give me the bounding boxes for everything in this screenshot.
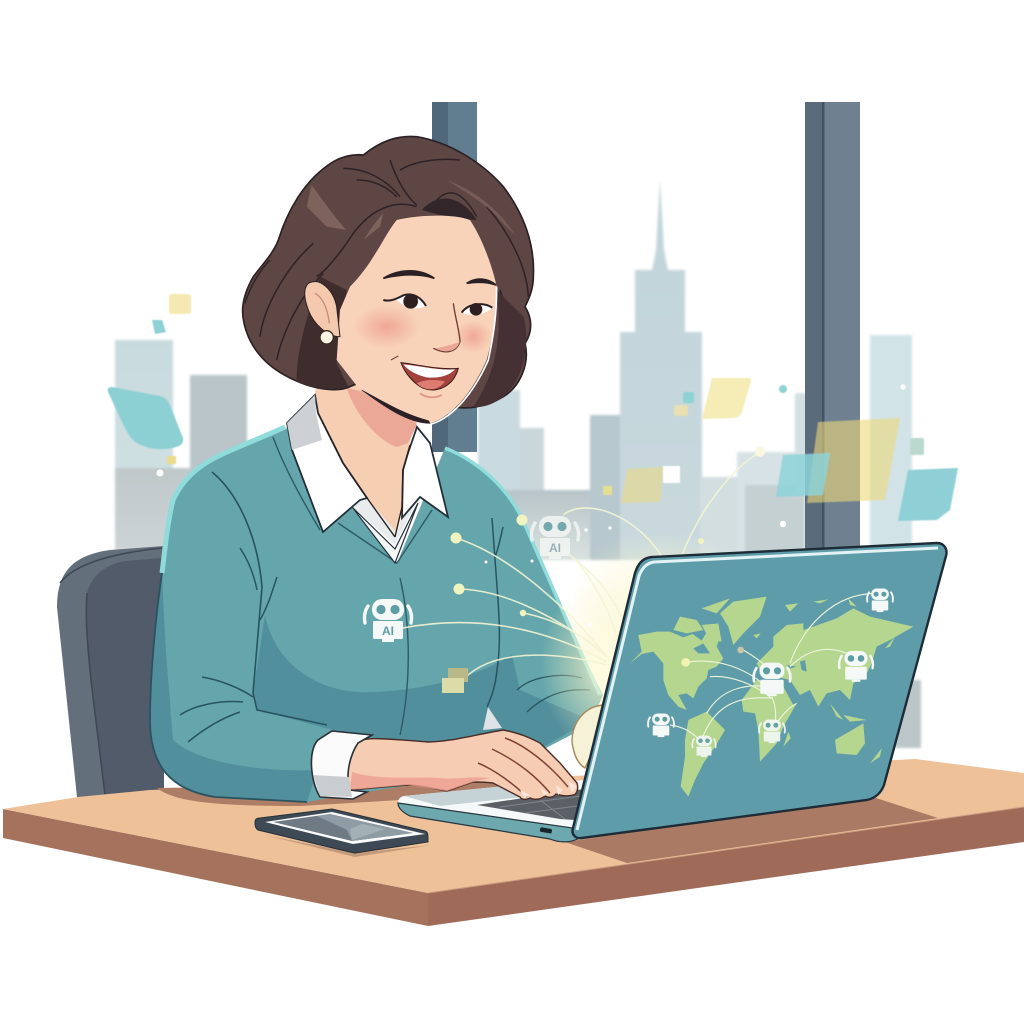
map robots <box>648 588 893 757</box>
eyebrows <box>383 271 434 278</box>
sleeve shading <box>150 573 317 802</box>
AI data connections <box>156 384 906 693</box>
inland seas <box>693 643 807 672</box>
map arcs <box>670 593 877 743</box>
light node <box>681 658 690 667</box>
neck <box>315 370 430 537</box>
shirt under arm <box>483 707 502 730</box>
city skyline <box>115 180 921 748</box>
window frames <box>432 102 860 549</box>
laptop shadow on desk <box>565 798 938 863</box>
head <box>243 136 533 424</box>
soft light above laptop <box>570 530 750 650</box>
floating data tiles <box>108 294 958 521</box>
neck shadow <box>347 388 417 447</box>
hair back <box>330 340 500 400</box>
blush <box>353 305 420 348</box>
keyboard <box>477 789 584 820</box>
port <box>540 827 552 834</box>
shirt cuff <box>311 731 372 799</box>
chair <box>57 546 164 797</box>
hair strands <box>245 159 528 360</box>
glowing orb <box>572 705 604 768</box>
face <box>337 216 497 423</box>
robot: window AI: AI <box>549 541 561 555</box>
robot: chest AI <box>364 599 412 642</box>
sweater lines <box>150 573 307 802</box>
woman <box>150 136 603 802</box>
world map <box>630 593 913 797</box>
data tile on sweater <box>442 668 468 693</box>
smartphone <box>255 809 432 857</box>
left forearm and hand <box>346 730 578 799</box>
sleeve shadow on desk <box>157 780 510 806</box>
ear <box>305 282 340 337</box>
continents <box>630 597 913 797</box>
light glow <box>540 573 684 757</box>
robot: window AI <box>531 516 579 559</box>
desk <box>3 759 1024 926</box>
torso shading <box>253 615 590 790</box>
nose <box>433 303 460 352</box>
connection arcs <box>403 452 760 680</box>
shirt collar <box>287 395 448 563</box>
eyes <box>383 294 492 316</box>
sweater <box>150 427 603 802</box>
earring <box>320 331 333 344</box>
light nodes <box>156 384 906 627</box>
laptop base <box>398 780 585 842</box>
robot: chest AI: AI <box>382 624 394 638</box>
hair <box>243 136 533 408</box>
mouth <box>401 363 458 390</box>
sweater light edges <box>162 427 285 573</box>
laptop screen <box>572 543 947 838</box>
